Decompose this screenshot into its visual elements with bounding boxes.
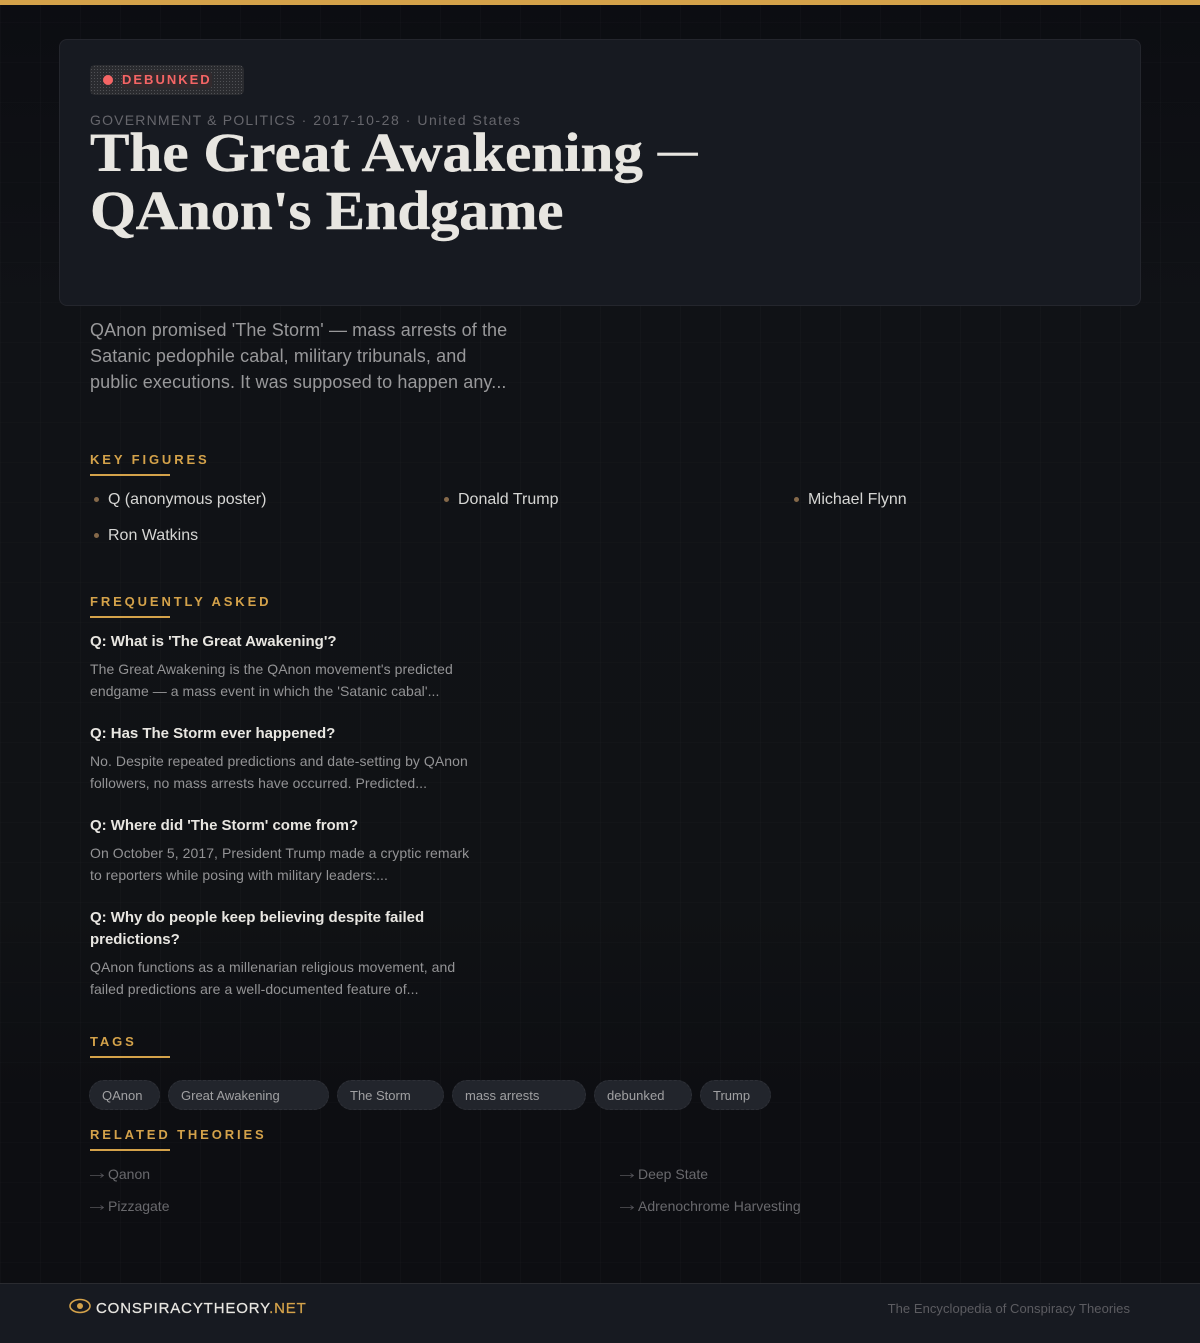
icon: eye logo (69, 1298, 91, 1314)
top accent bar (0, 0, 1200, 5)
faq item 3 (90, 817, 469, 883)
summary text (90, 320, 507, 392)
tag: mass arrests (465, 1088, 539, 1103)
summary text: QAnon promised 'The Storm' — mass arrests of the (90, 320, 507, 340)
badge dot (103, 75, 113, 85)
faq item 3: On October 5, 2017, President Trump made a cryptic remark (90, 845, 469, 861)
title: QAnon's Endgame (90, 180, 563, 241)
title: The Great Awakening — (90, 122, 698, 183)
logo text: CONSPIRACYTHEORY.NET (96, 1300, 307, 1316)
faq item 4: Q: Why do people keep believing despite failed (90, 909, 424, 926)
related link: Deep State: Deep State (638, 1166, 708, 1182)
summary text: Satanic pedophile cabal, military tribunals, and (90, 346, 466, 366)
tag: debunked (607, 1088, 665, 1103)
faq item 1: The Great Awakening is the QAnon movement's predicted (90, 661, 453, 677)
figure: Donald Trump: Donald Trump (458, 490, 558, 508)
tag (594, 1080, 692, 1110)
faq item 3: to reporters while posing with military leaders:... (90, 867, 388, 883)
faq item 2 (90, 725, 468, 791)
tag: The Storm (350, 1088, 411, 1103)
faq item 1 (90, 633, 453, 699)
heading: related theories: RELATED THEORIES (90, 1127, 267, 1142)
related link: Qanon: Qanon (108, 1166, 150, 1182)
summary text: public executions. It was supposed to happen any... (90, 372, 507, 392)
figure: Q: Q (anonymous poster) (108, 490, 266, 508)
category and date line: GOVERNMENT & POLITICS · 2017-10-28 · United States (90, 112, 521, 128)
tag (89, 1080, 160, 1110)
badge: debunked (90, 65, 244, 95)
faq item 4 (90, 909, 455, 997)
tag (700, 1080, 771, 1110)
figure: Michael Flynn: Michael Flynn (808, 490, 907, 508)
faq item 1: Q: What is 'The Great Awakening'? (90, 633, 337, 650)
title (90, 122, 698, 242)
tag (168, 1080, 329, 1110)
panel: hero header (59, 39, 1141, 306)
tag (337, 1080, 444, 1110)
faq item 2: No. Despite repeated predictions and date-setting by QAnon (90, 753, 468, 769)
faq item 2: followers, no mass arrests have occurred. Predicted... (90, 775, 427, 791)
faq list (90, 633, 469, 997)
related link: Adrenochrome Harvesting: Adrenochrome Harvesting (638, 1198, 801, 1214)
heading: tags: TAGS (90, 1034, 137, 1049)
tag: Great Awakening (181, 1088, 280, 1103)
faq item 1: endgame — a mass event in which the 'Satanic cabal'... (90, 683, 439, 699)
figure: Ron Watkins: Ron Watkins (108, 526, 198, 544)
related link: Pizzagate: Pizzagate (108, 1198, 169, 1214)
tag (452, 1080, 586, 1110)
faq item 4: QAnon functions as a millenarian religious movement, and (90, 959, 455, 975)
tag: QAnon (102, 1088, 142, 1103)
faq item 2: Q: Has The Storm ever happened? (90, 725, 335, 742)
faq item 3: Q: Where did 'The Storm' come from? (90, 817, 358, 834)
heading: frequently asked: FREQUENTLY ASKED (90, 594, 271, 609)
faq item 4: predictions? (90, 931, 180, 948)
key figures list (94, 490, 907, 544)
footer (0, 1283, 1200, 1343)
footer tagline: The Encyclopedia of Conspiracy Theories (888, 1301, 1130, 1316)
faq item 4: failed predictions are a well-documented feature of... (90, 981, 419, 997)
heading: key figures: KEY FIGURES (90, 452, 210, 467)
badge label: DEBUNKED (122, 72, 212, 87)
tag: Trump (713, 1088, 750, 1103)
tags row (89, 1080, 771, 1110)
